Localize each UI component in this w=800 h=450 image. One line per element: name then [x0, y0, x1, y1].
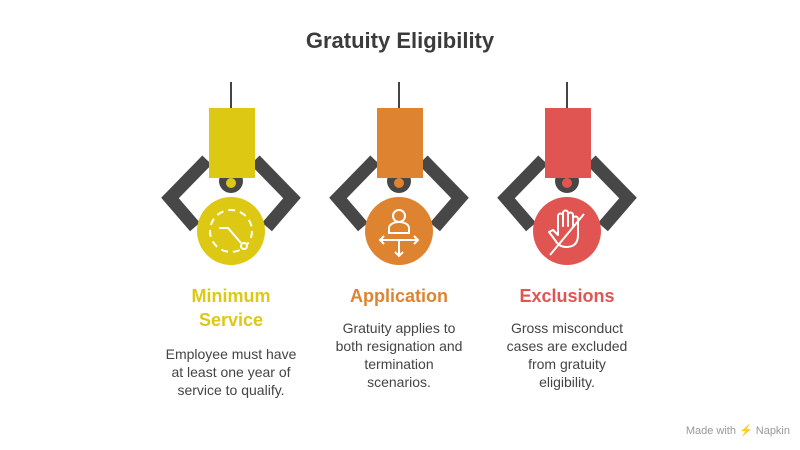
- text: application: both resignation and: [336, 338, 462, 354]
- heading: exclusions: Exclusions: [519, 286, 615, 306]
- text: application: [336, 320, 462, 390]
- heading: minimum service: [192, 286, 270, 330]
- claw 2: application: [338, 82, 460, 265]
- text: exclusions: eligibility.: [539, 374, 595, 390]
- text: exclusions: [507, 320, 627, 390]
- heading: minimum service: Minimum: [192, 286, 270, 306]
- text: minimum service: Employee must have: [166, 346, 296, 362]
- text: exclusions: Gross misconduct: [511, 320, 623, 336]
- icon: hand crossed: [549, 211, 584, 255]
- claw 1: minimum service: [170, 82, 292, 265]
- title: Gratuity Eligibility: [306, 28, 494, 53]
- text: exclusions: from gratuity: [528, 356, 606, 372]
- claw 3: exclusions: [506, 82, 628, 265]
- icon: clock: [210, 210, 252, 252]
- text: minimum service: at least one year of: [171, 364, 291, 380]
- text: exclusions: cases are excluded: [507, 338, 627, 354]
- heading: application: Application: [350, 286, 448, 306]
- watermark: Made with ⚡ Napkin: [686, 425, 790, 437]
- text: application: scenarios.: [367, 374, 431, 390]
- icon: person arrows: [380, 210, 418, 256]
- text: minimum service: [166, 346, 296, 398]
- text: minimum service: service to qualify.: [177, 382, 285, 398]
- text: application: Gratuity applies to: [343, 320, 455, 336]
- heading: minimum service: Service: [199, 310, 263, 330]
- text: application: termination: [364, 356, 434, 372]
